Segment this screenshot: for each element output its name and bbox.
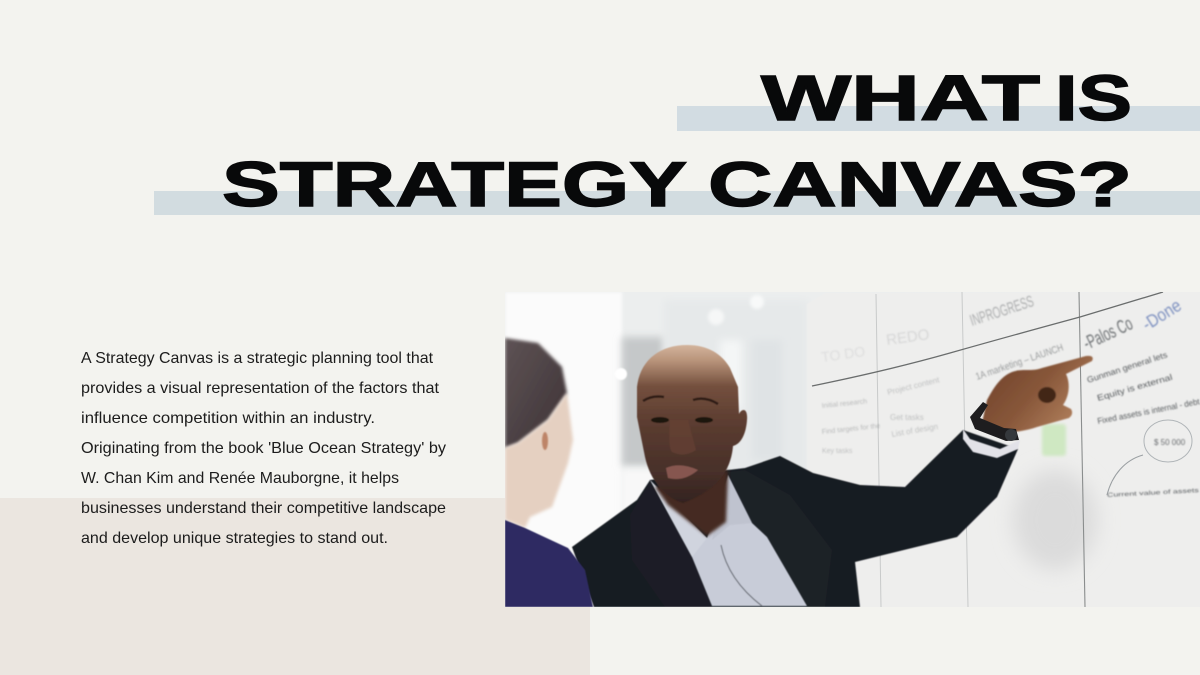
man: shirt [650, 475, 807, 606]
handwriting: Current value of assets [1107, 488, 1199, 499]
whiteboard [807, 292, 1200, 607]
man: neck [655, 470, 728, 536]
handwriting: Initial research [821, 398, 868, 410]
handwriting: TO DO [820, 343, 866, 365]
man: head [637, 345, 747, 503]
handwriting: Project content [886, 375, 941, 397]
title: CANVAS? [708, 150, 1132, 220]
man: pointing hand [982, 356, 1093, 432]
handwriting: List of design [891, 422, 939, 439]
handwriting: Get tasks [890, 413, 924, 422]
photo: man presenting at a whiteboard [505, 292, 1200, 607]
text block: strategy canvas description: businesses understand their competitive landscape [81, 500, 446, 517]
text block: strategy canvas description: and develop unique strategies to stand out. [81, 530, 388, 547]
title: IS [1055, 62, 1132, 134]
handwriting: -Done [1139, 295, 1185, 334]
man: shirt cuff [963, 429, 1020, 458]
handwriting: $ 50 000 [1154, 438, 1186, 447]
handwriting: Key tasks [822, 448, 853, 455]
woman: face and neck [505, 393, 573, 528]
title: WHAT [761, 62, 1040, 134]
photo background [505, 292, 1200, 607]
text block: strategy canvas description: provides a visual representation of the factors that [81, 380, 440, 397]
handwriting: Find targets for the [821, 423, 881, 436]
title highlight bar: second line [154, 191, 1200, 215]
man: suit jacket [572, 430, 1018, 607]
title: STRATEGY [222, 150, 687, 220]
woman: blouse [505, 520, 593, 607]
man: watch [970, 402, 1019, 441]
text block: strategy canvas description: W. Chan Kim and Renée Mauborgne, it helps [81, 470, 399, 487]
handwriting: -Palos Co [1080, 314, 1136, 355]
title highlight bar: first line [677, 106, 1200, 131]
text block: strategy canvas description [81, 350, 446, 547]
handwriting: 1A marketing – LAUNCH [974, 342, 1065, 383]
title [222, 62, 1132, 220]
handwriting: Equity is external [1096, 372, 1174, 403]
woman: ear [542, 432, 548, 450]
green sticky note [1042, 424, 1066, 456]
handwriting: REDO [885, 326, 930, 349]
woman: hair [505, 338, 567, 448]
panel: lower-left beige block [0, 498, 590, 675]
text block: strategy canvas description: influence competition within an industry. [81, 410, 375, 427]
text block: strategy canvas description: Originating from the book 'Blue Ocean Strategy' by [81, 440, 446, 457]
handwriting [820, 293, 1200, 499]
text block: strategy canvas description: A Strategy Canvas is a strategic planning tool that [81, 350, 434, 367]
handwriting: Gunman general lets [1086, 349, 1169, 385]
